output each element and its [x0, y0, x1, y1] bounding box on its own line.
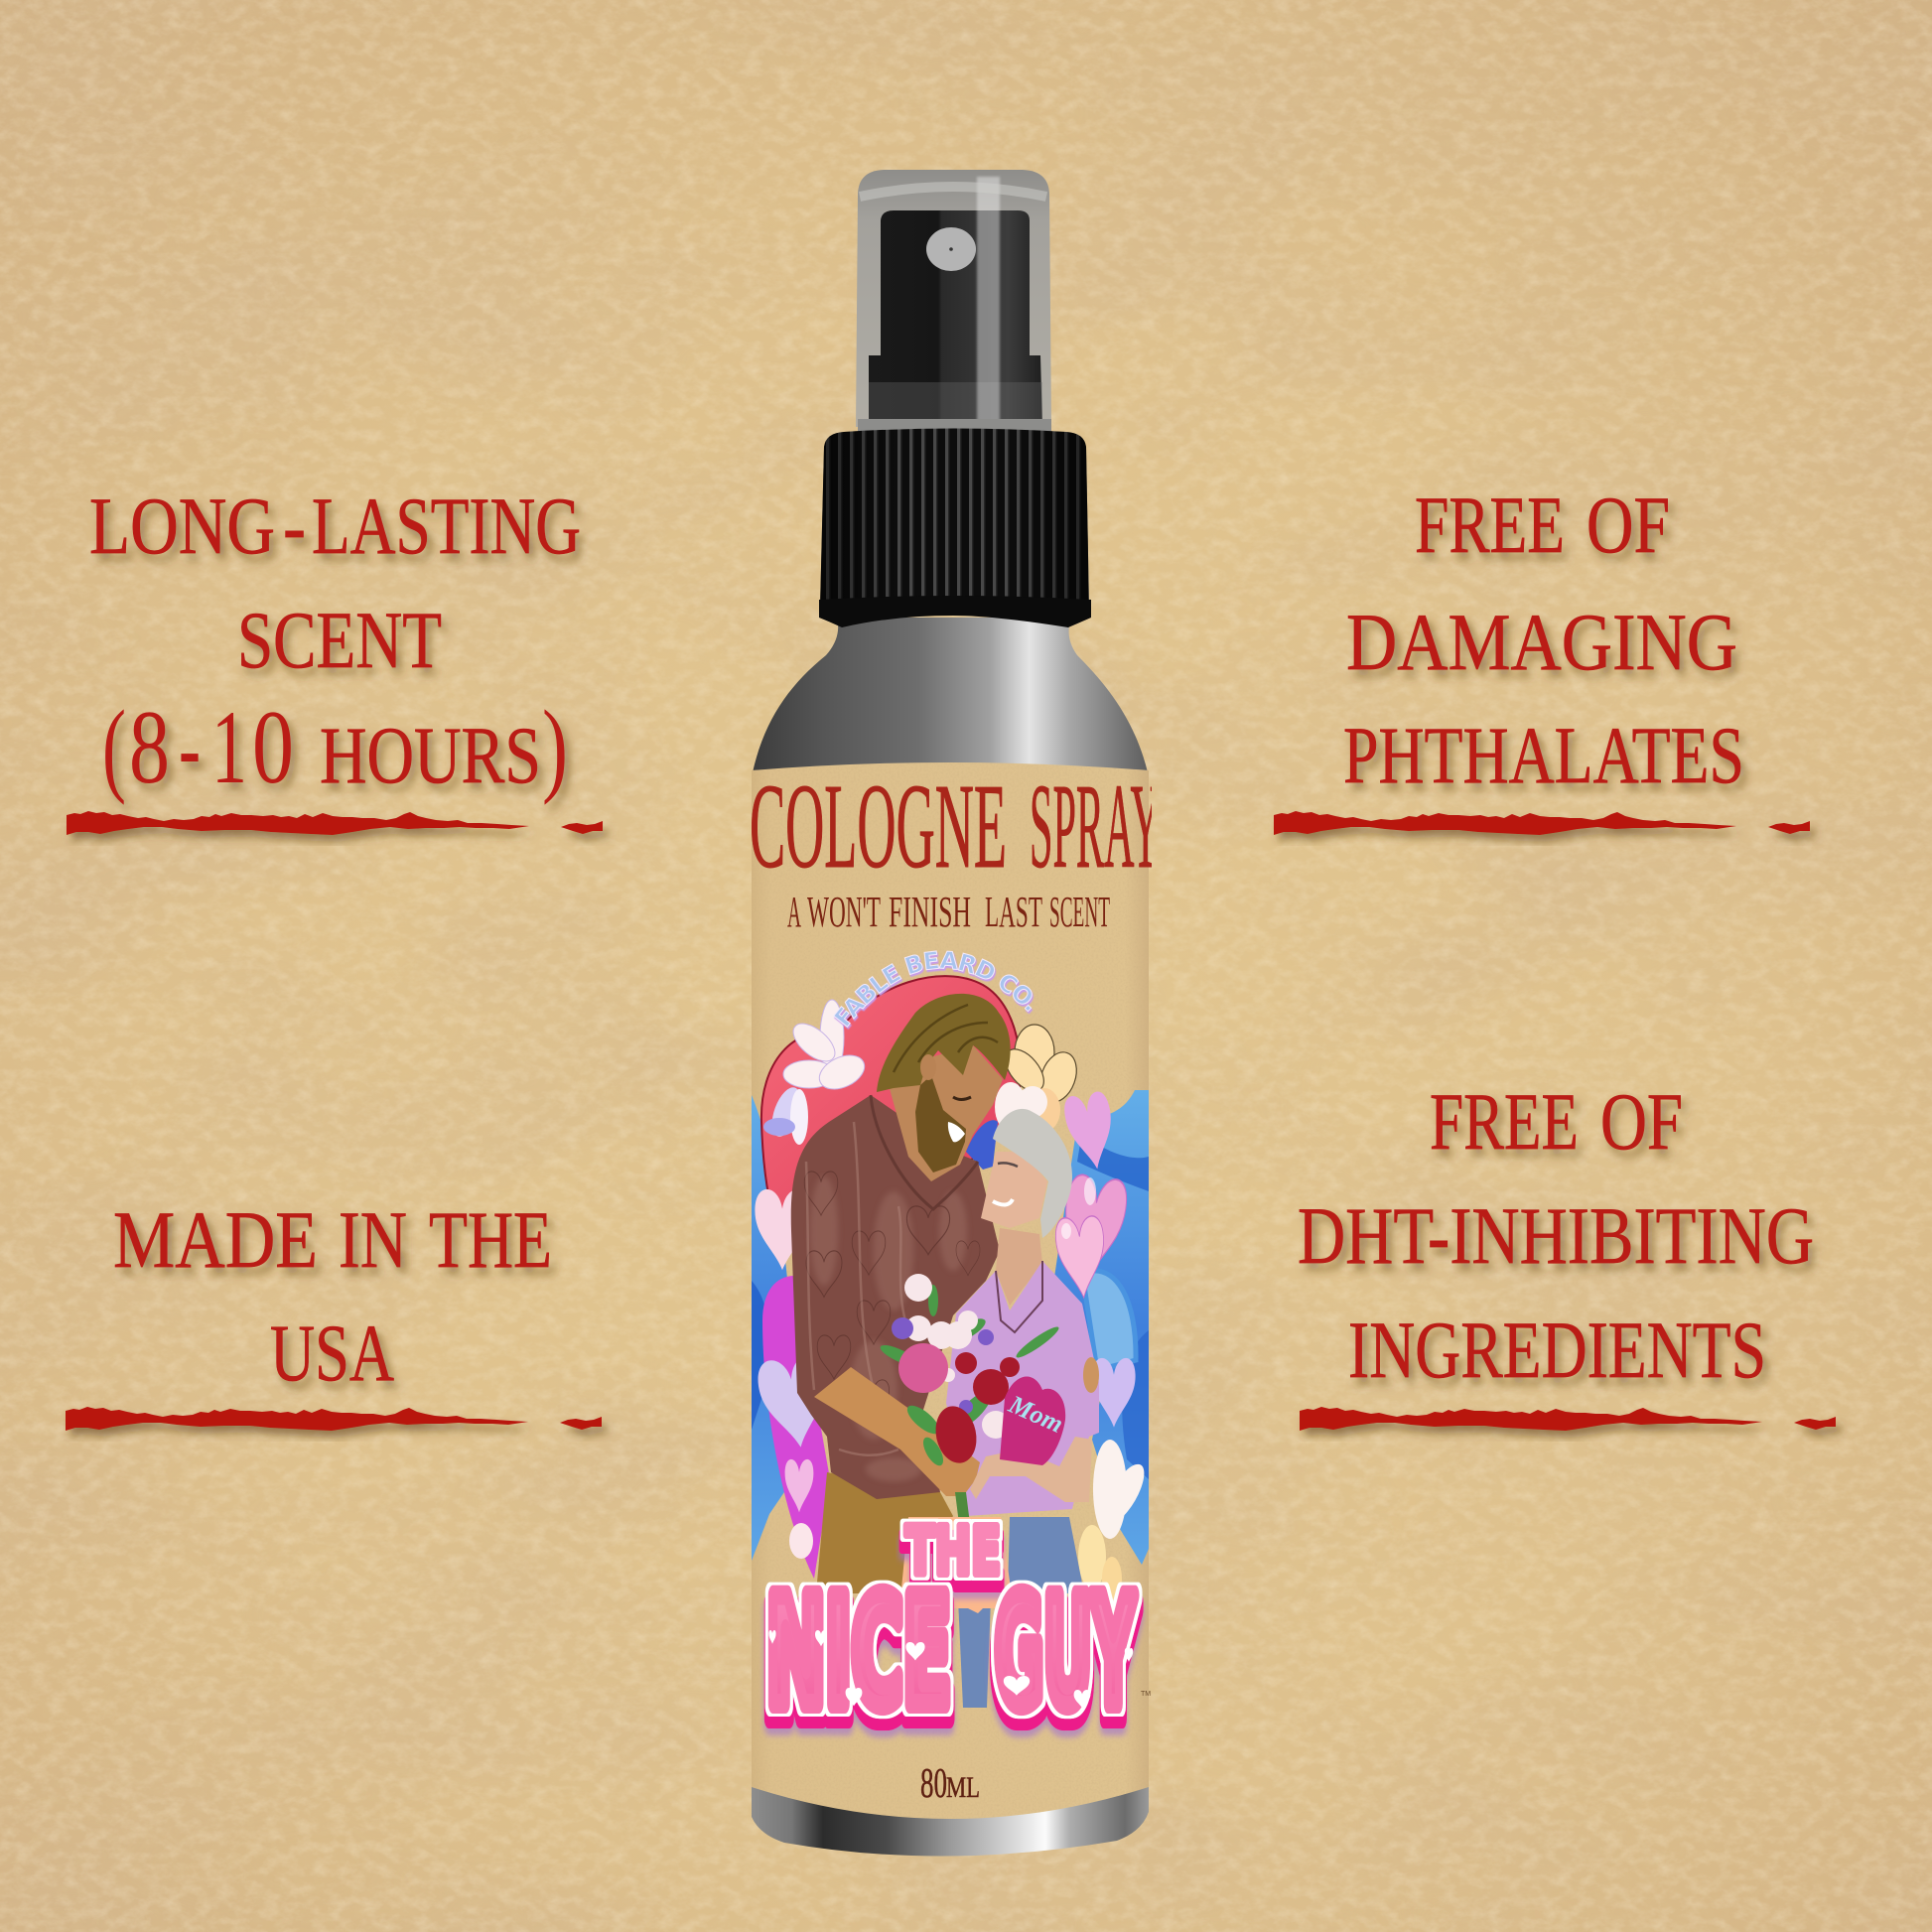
man's eye — [953, 1097, 971, 1100]
woman's neck — [996, 1228, 1042, 1306]
mom heart — [1000, 1377, 1067, 1465]
bouquet stems — [955, 1492, 970, 1524]
man's sweater — [791, 1095, 1000, 1499]
feature text: made in the USA: MADE — [113, 1194, 318, 1285]
product name: the nice guy: THE — [905, 1513, 1001, 1589]
lavender flower — [763, 1083, 808, 1145]
bouquet leaves — [878, 1285, 1061, 1468]
feature text: made in the USA: USA — [270, 1308, 394, 1398]
red roses — [930, 1352, 1020, 1467]
white blossoms — [904, 1274, 1010, 1439]
feature text: free of DHT-inhibiting ingredients: OF — [1600, 1076, 1683, 1167]
purple blossoms — [892, 1317, 994, 1414]
bouquet — [878, 1274, 1061, 1468]
large red heart — [761, 976, 1021, 1231]
product name: the nice guy: NICE — [766, 1567, 951, 1739]
feature text: long-lasting scent — [89, 481, 581, 805]
feature text: long-lasting scent: 1 — [211, 689, 247, 805]
feature text: long-lasting scent: ( — [102, 689, 126, 805]
feature text: long-lasting scent: LONG — [89, 481, 275, 571]
man's arm — [814, 1367, 980, 1496]
woman's trousers — [958, 1517, 1084, 1708]
blue watercolor washes — [752, 1090, 1149, 1565]
man's neck and face — [889, 1045, 1003, 1181]
feature text: made in the USA: THE — [429, 1194, 552, 1285]
volume text: ML — [946, 1771, 980, 1804]
label illustration — [752, 950, 1150, 1740]
ribbed black collar — [819, 429, 1091, 627]
white hearts in the letters — [768, 1630, 1133, 1709]
cologne spray bottle — [752, 170, 1152, 1857]
feature text: free of damaging phthalates — [1343, 480, 1744, 800]
feature text: free of DHT-inhibiting ingredients: INGREDIENTS — [1348, 1305, 1766, 1395]
clear overcap with black sprayer — [856, 170, 1051, 432]
feature text: made in the USA: IN — [339, 1194, 407, 1285]
feature text: made in the USA — [113, 1194, 552, 1398]
label tagline: FINISH — [889, 888, 971, 936]
feature text: long-lasting scent: 8 — [129, 689, 170, 805]
feature text: long-lasting scent: ) — [542, 689, 568, 805]
label paper grain — [752, 755, 1149, 1847]
kraft label — [752, 762, 1149, 1819]
man's ear — [920, 1054, 936, 1080]
label tagline: LAST — [985, 888, 1042, 936]
label heading: cologne spray: COLOGNE — [750, 759, 1007, 894]
label heading: cologne spray — [752, 786, 1152, 868]
feature text: free of DHT-inhibiting ingredients — [1298, 1076, 1814, 1395]
feature text: long-lasting scent: LASTING — [312, 481, 581, 571]
feature text: long-lasting scent: - — [179, 689, 201, 805]
feature text: long-lasting scent: - — [283, 481, 306, 571]
feature text: long-lasting scent: HOURS — [320, 710, 541, 800]
white flower behind head — [995, 1082, 1047, 1132]
cologne spray bottle: SCENT — [1049, 888, 1110, 936]
white flower — [782, 999, 866, 1090]
label tagline: A — [787, 888, 801, 936]
lower right flowers — [1078, 1440, 1152, 1600]
feature text: free of DHT-inhibiting ingredients: FREE — [1430, 1076, 1579, 1167]
man's hair — [877, 994, 1011, 1092]
smile — [948, 1122, 965, 1142]
mom heart: Mom — [1004, 1389, 1067, 1439]
torn red underline: lower right — [1300, 1407, 1836, 1431]
text: SPRAY — [1030, 759, 1161, 894]
label tagline — [787, 888, 1110, 936]
torn red underline: top right — [1274, 811, 1810, 835]
feature text: free of damaging phthalates: FREE — [1415, 480, 1565, 570]
woman's face — [981, 1152, 1047, 1228]
hair strands — [894, 1005, 998, 1072]
label illustration: FABLE BEARD CO. — [834, 950, 1035, 1031]
beard — [915, 1075, 966, 1173]
man's trousers — [816, 1472, 953, 1593]
yellow flower — [998, 1025, 1083, 1132]
brand arc text — [846, 969, 1044, 1029]
text: GUY — [995, 1567, 1136, 1739]
blue and red petals — [966, 1120, 998, 1170]
woman's shirt — [946, 1261, 1099, 1516]
feature text: free of DHT-inhibiting ingredients: DHT-INHIBITING — [1298, 1190, 1814, 1281]
woman's arm — [970, 1437, 1092, 1502]
torn red underline: top left — [67, 811, 603, 835]
feature text: long-lasting scent: SCENT — [237, 595, 442, 685]
feature text: free of damaging phthalates: OF — [1587, 480, 1670, 570]
small flower left — [789, 1523, 813, 1559]
man's hand on shoulder — [1083, 1357, 1099, 1393]
woman's hair — [993, 1109, 1072, 1238]
pale hearts on the left — [755, 1189, 1136, 1512]
volume text: 80 — [920, 1761, 947, 1807]
feature text: free of damaging phthalates: PHTHALATES — [1343, 710, 1744, 800]
aluminium base — [752, 1782, 1149, 1857]
pink rose — [898, 1343, 948, 1393]
aluminium shoulder — [753, 618, 1148, 772]
label tagline: WON'T — [807, 888, 881, 936]
pink hearts on the right — [1054, 1090, 1130, 1300]
magenta heart — [762, 1276, 830, 1579]
feature text: free of damaging phthalates: DAMAGING — [1346, 597, 1737, 687]
feature text: long-lasting scent: 0 — [252, 689, 294, 805]
blue bubble — [1082, 1271, 1136, 1370]
torn red underline: lower left — [66, 1407, 602, 1431]
trademark mark: TM — [1141, 1691, 1151, 1698]
